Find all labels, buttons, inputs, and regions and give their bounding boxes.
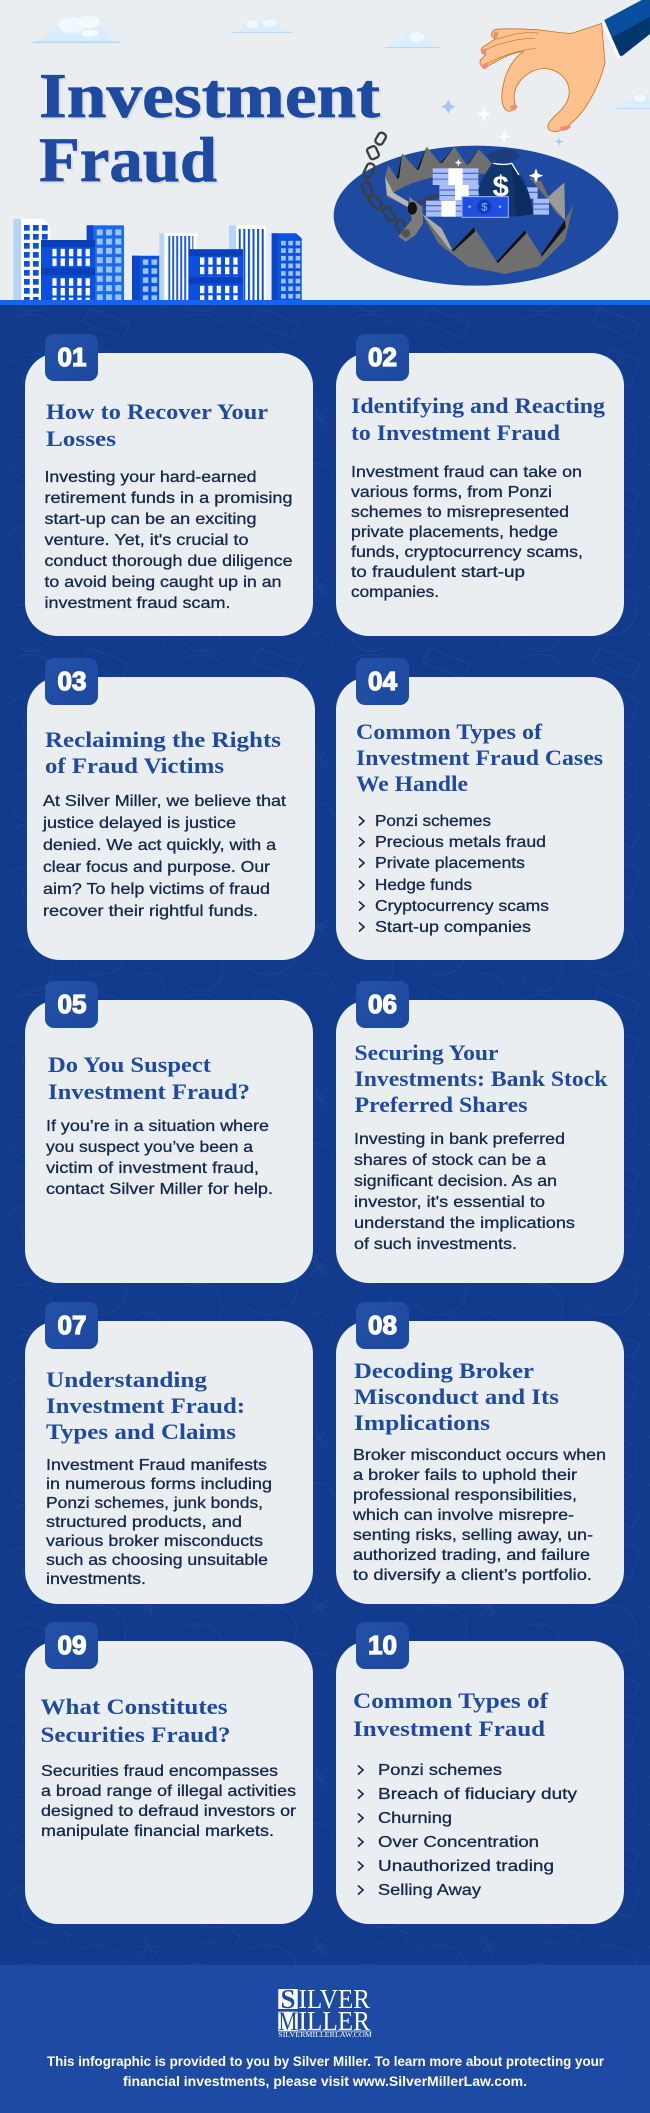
body 08: a broker fails to uphold their: [353, 1467, 578, 1484]
heading 04: We Handle: [356, 771, 468, 796]
body 07: [46, 1457, 272, 1588]
body 06: [354, 1131, 575, 1253]
heading 03: of Fraud Victims: [45, 753, 224, 778]
body 02: private placements, hedge: [351, 524, 558, 541]
heading 10: [353, 1688, 549, 1741]
sparkles: [441, 99, 564, 183]
body 06: significant decision. As an: [354, 1173, 557, 1190]
body 03: At Silver Miller, we believe that: [43, 793, 287, 810]
body 09: manipulate financial markets.: [41, 1823, 274, 1840]
body 09: designed to defraud investors or: [41, 1803, 297, 1820]
chain: [361, 131, 409, 236]
trap front jaw: [422, 205, 573, 274]
body 01: Investing your hard-earned: [44, 469, 256, 486]
body 07: Investment Fraud manifests: [46, 1457, 267, 1474]
heading 03: [45, 727, 281, 778]
body 09: [41, 1763, 297, 1840]
card 06 background: [336, 1000, 624, 1283]
card 01 background: [25, 353, 313, 636]
badge 03: [45, 658, 98, 705]
list 04: Precious metals fraud: [375, 834, 546, 851]
body 02: companies.: [351, 584, 439, 601]
card 07 background: [25, 1321, 313, 1604]
body 08: Broker misconduct occurs when: [353, 1447, 606, 1464]
building: front block left: [41, 240, 95, 300]
badge 01: [45, 334, 98, 381]
dollar bill: [462, 197, 508, 217]
body 01: conduct thorough due diligence: [44, 553, 293, 570]
city skyline: [13, 219, 302, 300]
body 03: clear focus and purpose. Our: [43, 859, 271, 876]
list 04: Private placements: [375, 855, 525, 872]
body 01: start-up can be an exciting: [44, 511, 256, 528]
badge 03: 03: [58, 666, 86, 696]
panel 01: how to recover: [25, 334, 313, 636]
body 01: to avoid being caught up in an: [44, 574, 282, 591]
badge 07: 07: [58, 1310, 86, 1340]
heading 09: Securities Fraud?: [40, 1722, 230, 1747]
heading 01: [46, 399, 268, 451]
heading 09: What Constitutes: [40, 1694, 228, 1719]
body 09: a broad range of illegal activities: [41, 1783, 296, 1800]
sleeve: [601, 0, 650, 58]
footer text: [47, 2053, 605, 2089]
body 02: schemes to misrepresented: [351, 504, 569, 521]
panel 03: reclaiming the rights: [27, 658, 315, 960]
panel 04: common types of cases: [336, 658, 624, 960]
body 09: Securities fraud encompasses: [41, 1763, 278, 1780]
logo: silver miller: SILVERMILLERLAW.COM: [278, 2030, 372, 2039]
body 03: justice delayed is justice: [42, 815, 236, 832]
panel 06: securing your investments: [336, 981, 624, 1283]
footer text: financial investments, please visit www.SilverMillerLaw.com.: [123, 2073, 527, 2089]
body 05: contact Silver Miller for help.: [46, 1181, 273, 1198]
building: low blue block: [132, 256, 169, 300]
badge 06: 06: [368, 989, 397, 1019]
building: front block right: [189, 249, 243, 300]
card 10 background: [336, 1641, 624, 1924]
list 10: Breach of fiduciary duty: [378, 1786, 577, 1803]
list 10: [358, 1762, 577, 1899]
heading 02: to Investment Fraud: [351, 420, 561, 445]
heading 10: Investment Fraud: [353, 1716, 546, 1741]
badge 04: 04: [368, 666, 397, 696]
card 08 background: [336, 1321, 624, 1604]
logo: silver miller: ILVER: [298, 1984, 370, 2014]
body 07: Ponzi schemes, junk bonds,: [46, 1495, 263, 1512]
list 04: Start-up companies: [375, 919, 531, 936]
building: striped tower right: [229, 225, 266, 300]
logo: silver miller: [278, 1984, 372, 2039]
badge 10: [356, 1622, 409, 1669]
logo: silver miller: ILLER: [298, 2006, 370, 2036]
building: white left tower: [13, 219, 50, 300]
body 05: you suspect you’ve been a: [46, 1139, 253, 1156]
body 08: authorized trading, and failure: [353, 1547, 590, 1564]
panel 10: common types of investment fraud: [336, 1622, 624, 1924]
logo: silver miller: S: [280, 1984, 296, 2014]
trap back jaw: [385, 147, 565, 220]
badge 01: 01: [58, 342, 86, 372]
badge 08: [356, 1302, 409, 1349]
heading 07: [46, 1367, 245, 1444]
panel 05: do you suspect: [25, 981, 313, 1283]
list 10: Ponzi schemes: [378, 1762, 502, 1779]
list 04: Ponzi schemes: [375, 813, 491, 830]
body 02: Investment fraud can take on: [351, 464, 582, 481]
heading 05: Investment Fraud?: [48, 1079, 250, 1104]
badge 09: 09: [58, 1630, 86, 1660]
body 05: victim of investment fraud,: [46, 1160, 259, 1177]
badge 05: [45, 981, 98, 1028]
trap pivot: [398, 197, 423, 242]
heading 10: Common Types of: [353, 1688, 549, 1713]
header background: [0, 0, 650, 305]
dollar bill: $: [481, 202, 488, 214]
hand: [480, 23, 605, 132]
body 06: investor, it's essential to: [354, 1194, 545, 1211]
card 09 background: [25, 1641, 313, 1924]
badge 08: 08: [368, 1310, 397, 1340]
list 10: Over Concentration: [378, 1834, 539, 1851]
panel 09: what constitutes securities fraud: [25, 1622, 313, 1924]
body 08: which can involve misrepre-: [352, 1507, 574, 1524]
title: Fraud: [41, 126, 219, 197]
body 02: [351, 464, 583, 601]
body 03: denied. We act quickly, with a: [43, 837, 276, 854]
body 07: various broker misconducts: [46, 1533, 263, 1550]
money bag: [478, 149, 533, 217]
body 05: [46, 1118, 273, 1198]
body 08: [352, 1447, 606, 1584]
badge 07: [45, 1302, 98, 1349]
badge 05: 05: [58, 989, 86, 1019]
heading 06: [354, 1040, 608, 1117]
title: Investment: [39, 60, 381, 131]
badge 02: 02: [368, 342, 397, 372]
body 08: to diversify a client’s portfolio.: [353, 1567, 592, 1584]
cloud: top middle: [232, 17, 292, 33]
title: Fraud: [39, 124, 217, 195]
list 04: Cryptocurrency scams: [375, 898, 549, 915]
heading 09: [40, 1694, 230, 1747]
heading 04: Investment Fraud Cases: [356, 745, 603, 770]
panel 02: identifying and reacting: [336, 334, 624, 636]
card 04 background: [336, 677, 624, 960]
body 03: aim? To help victims of fraud: [43, 881, 270, 898]
heading 06: Investments: Bank Stock: [354, 1066, 608, 1091]
list 10: Selling Away: [378, 1882, 481, 1899]
heading 02: Identifying and Reacting: [351, 393, 606, 418]
building: blue tower left: [87, 225, 125, 300]
heading 04: [356, 719, 603, 796]
body 07: in numerous forms including: [46, 1476, 272, 1493]
body 01: investment fraud scam.: [44, 595, 230, 612]
body 08: professional responsibilities,: [353, 1487, 577, 1504]
body 07: investments.: [46, 1571, 146, 1588]
logo: silver miller: M: [278, 2007, 298, 2036]
list 10: Churning: [378, 1810, 452, 1827]
cloud: top right: [385, 30, 441, 48]
heading 01: How to Recover Your: [46, 399, 268, 424]
body 08: senting risks, selling away, un-: [353, 1527, 593, 1544]
heading 08: Implications: [354, 1410, 490, 1435]
body 01: [44, 469, 293, 612]
building: striped tower middle: [159, 233, 197, 300]
money stacks: [426, 168, 549, 217]
body 05: If you’re in a situation where: [46, 1118, 269, 1135]
card 03 background: [27, 677, 315, 960]
blue header divider: [0, 300, 650, 305]
cloud: far right: [615, 93, 650, 109]
illustration: bear trap with money and hand: [334, 0, 650, 286]
heading 07: Understanding: [46, 1367, 208, 1392]
body 06: of such investments.: [354, 1236, 517, 1253]
badge 02: [356, 334, 409, 381]
body 06: shares of stock can be a: [354, 1152, 546, 1169]
panel 08: decoding broker misconduct: [336, 1302, 624, 1604]
body 07: structured products, and: [46, 1514, 242, 1531]
list 04: [359, 813, 549, 936]
heading 08: Misconduct and Its: [354, 1384, 559, 1409]
heading 07: Types and Claims: [46, 1419, 236, 1444]
heading 05: [48, 1052, 250, 1104]
list 04: Hedge funds: [375, 877, 472, 894]
blue ellipse: [334, 146, 618, 286]
navy patterned background: [0, 305, 650, 1965]
heading 04: Common Types of: [356, 719, 543, 744]
badge 04: [356, 658, 409, 705]
heading 08: [354, 1358, 559, 1435]
body 02: funds, cryptocurrency scams,: [351, 544, 583, 561]
footer panel: [0, 1965, 650, 2113]
list 10: Unauthorized trading: [378, 1858, 554, 1875]
title: Investment: [41, 62, 383, 133]
footer text: This infographic is provided to you by Silver Miller. To learn more about protecting your: [47, 2053, 605, 2069]
heading 07: Investment Fraud:: [46, 1393, 245, 1418]
cloud: top left: [33, 16, 120, 43]
badge 06: [356, 981, 409, 1028]
money bag: $: [493, 171, 509, 204]
building: blue tower right: [272, 233, 302, 300]
body 06: understand the implications: [354, 1215, 575, 1232]
panel 07: understanding investment fraud: [25, 1302, 313, 1604]
heading 06: Preferred Shares: [354, 1092, 528, 1117]
card 05 background: [25, 1000, 313, 1283]
heading 02: [351, 393, 606, 445]
heading 03: Reclaiming the Rights: [45, 727, 281, 752]
body 02: various forms, from Ponzi: [351, 484, 552, 501]
body 03: recover their rightful funds.: [43, 903, 258, 920]
badge 09: [45, 1622, 98, 1669]
heading 08: Decoding Broker: [354, 1358, 534, 1383]
body 06: Investing in bank preferred: [354, 1131, 565, 1148]
body 01: venture. Yet, it's crucial to: [44, 532, 249, 549]
title: [39, 60, 383, 197]
heading 06: Securing Your: [354, 1040, 499, 1065]
badge 10: 10: [368, 1630, 397, 1660]
body 01: retirement funds in a promising: [44, 490, 292, 507]
body 02: to fraudulent start-up: [351, 564, 525, 581]
body 03: [42, 793, 287, 920]
body 07: such as choosing unsuitable: [46, 1552, 268, 1569]
card 02 background: [336, 353, 624, 636]
heading 05: Do You Suspect: [48, 1052, 212, 1077]
heading 01: Losses: [46, 426, 116, 451]
